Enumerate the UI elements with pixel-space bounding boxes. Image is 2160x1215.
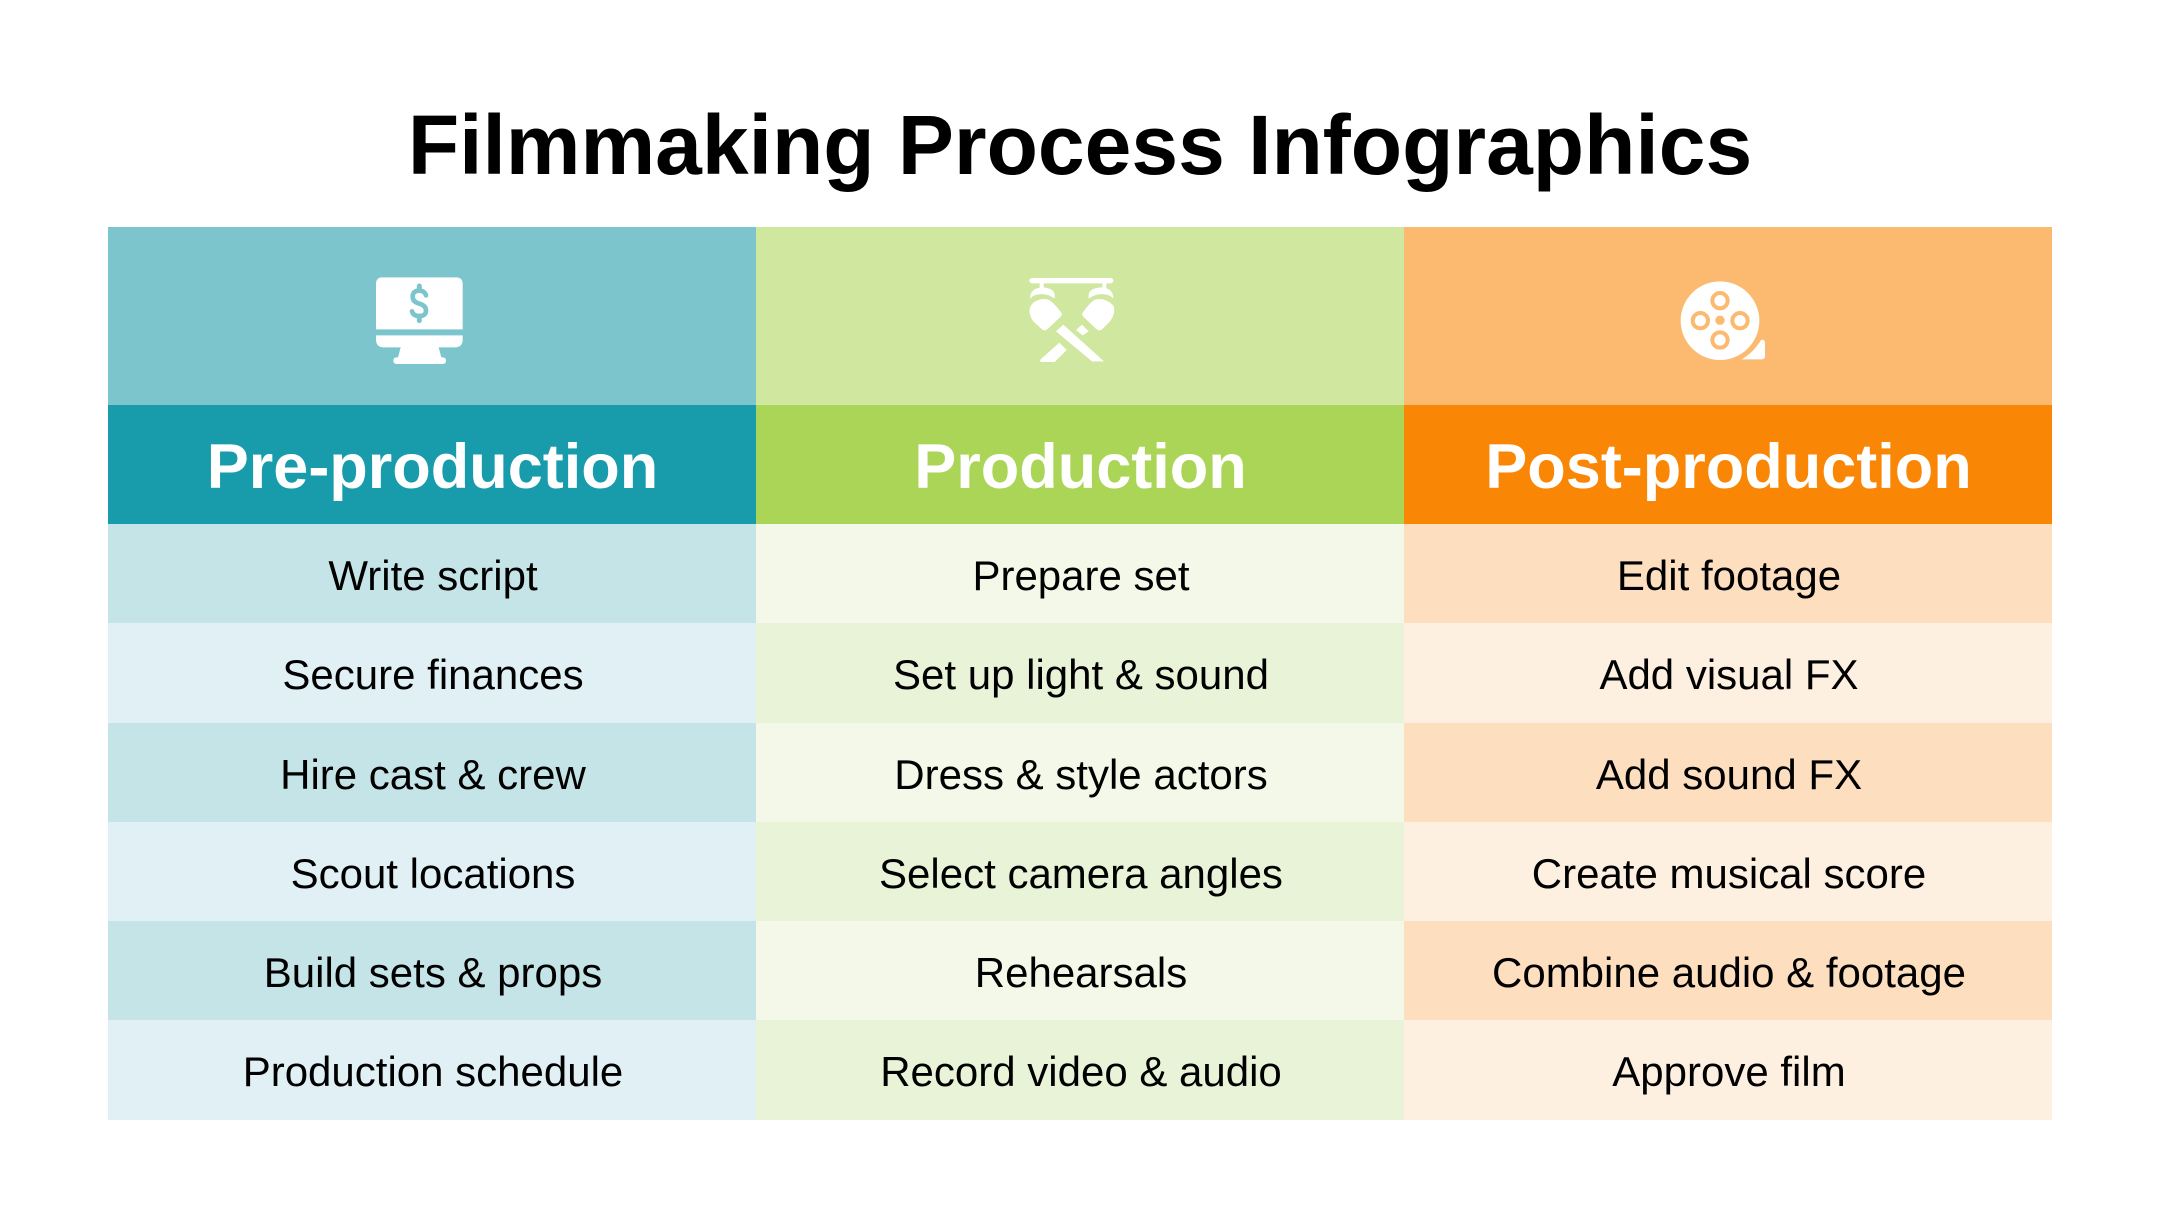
step: record video and audio: Record video & audio	[880, 1048, 1282, 1095]
step: prepare set: Prepare set	[972, 552, 1190, 599]
panel: pre-production column	[108, 227, 756, 1120]
step: add visual fx: Add visual FX	[1599, 651, 1859, 698]
step: create musical score: Create musical score	[1532, 850, 1926, 897]
step: approve film	[1404, 1020, 2052, 1120]
step: hire cast and crew: Hire cast & crew	[280, 751, 586, 798]
heading: production	[756, 405, 1404, 524]
step: edit footage: Edit footage	[1617, 552, 1841, 599]
step: approve film: Approve film	[1612, 1048, 1846, 1095]
step: dress and style actors	[756, 723, 1404, 822]
step: hire cast and crew	[108, 723, 756, 822]
panel: post-production column	[1404, 227, 2052, 1120]
step: build sets and props	[108, 921, 756, 1020]
step: combine audio and footage	[1404, 921, 2052, 1020]
step: combine audio and footage: Combine audio & footage	[1492, 949, 1966, 996]
step: add sound fx: Add sound FX	[1596, 751, 1862, 798]
step: write script	[108, 524, 756, 623]
step: production schedule	[108, 1020, 756, 1120]
step: dress and style actors: Dress & style actors	[894, 751, 1268, 798]
step: rehearsals	[756, 921, 1404, 1020]
panel: production column	[756, 227, 1404, 1120]
icon band: production	[756, 227, 1404, 405]
step: edit footage	[1404, 524, 2052, 623]
step: write script: Write script	[328, 552, 538, 599]
step: production schedule: Production schedule	[243, 1048, 623, 1095]
step: set up light and sound	[756, 623, 1404, 723]
step: select camera angles	[756, 822, 1404, 921]
step: scout locations: Scout locations	[291, 850, 575, 897]
heading: post-production: Post-production	[1485, 432, 1972, 502]
step: create musical score	[1404, 822, 2052, 921]
icon: monitor with dollar sign	[376, 277, 463, 364]
heading: production: Production	[914, 432, 1247, 502]
heading: pre-production	[108, 405, 756, 524]
heading: pre-production: Pre-production	[207, 432, 658, 502]
step: prepare set	[756, 524, 1404, 623]
step: record video and audio	[756, 1020, 1404, 1120]
step: rehearsals: Rehearsals	[975, 949, 1187, 996]
step: secure finances	[108, 623, 756, 723]
step: add visual fx	[1404, 623, 2052, 723]
icon: film reel	[1680, 281, 1765, 360]
step: select camera angles: Select camera angles	[879, 850, 1283, 897]
icon band: post-production	[1404, 227, 2052, 405]
step: set up light and sound: Set up light & sound	[893, 651, 1269, 698]
icon: crossed stage lights	[1029, 278, 1114, 362]
title: Filmmaking Process Infographics	[408, 98, 1752, 192]
step: secure finances: Secure finances	[282, 651, 584, 698]
step: scout locations	[108, 822, 756, 921]
heading: post-production	[1404, 405, 2052, 524]
step: build sets and props: Build sets & props	[264, 949, 602, 996]
icon band: pre-production	[108, 227, 756, 405]
step: add sound fx	[1404, 723, 2052, 822]
